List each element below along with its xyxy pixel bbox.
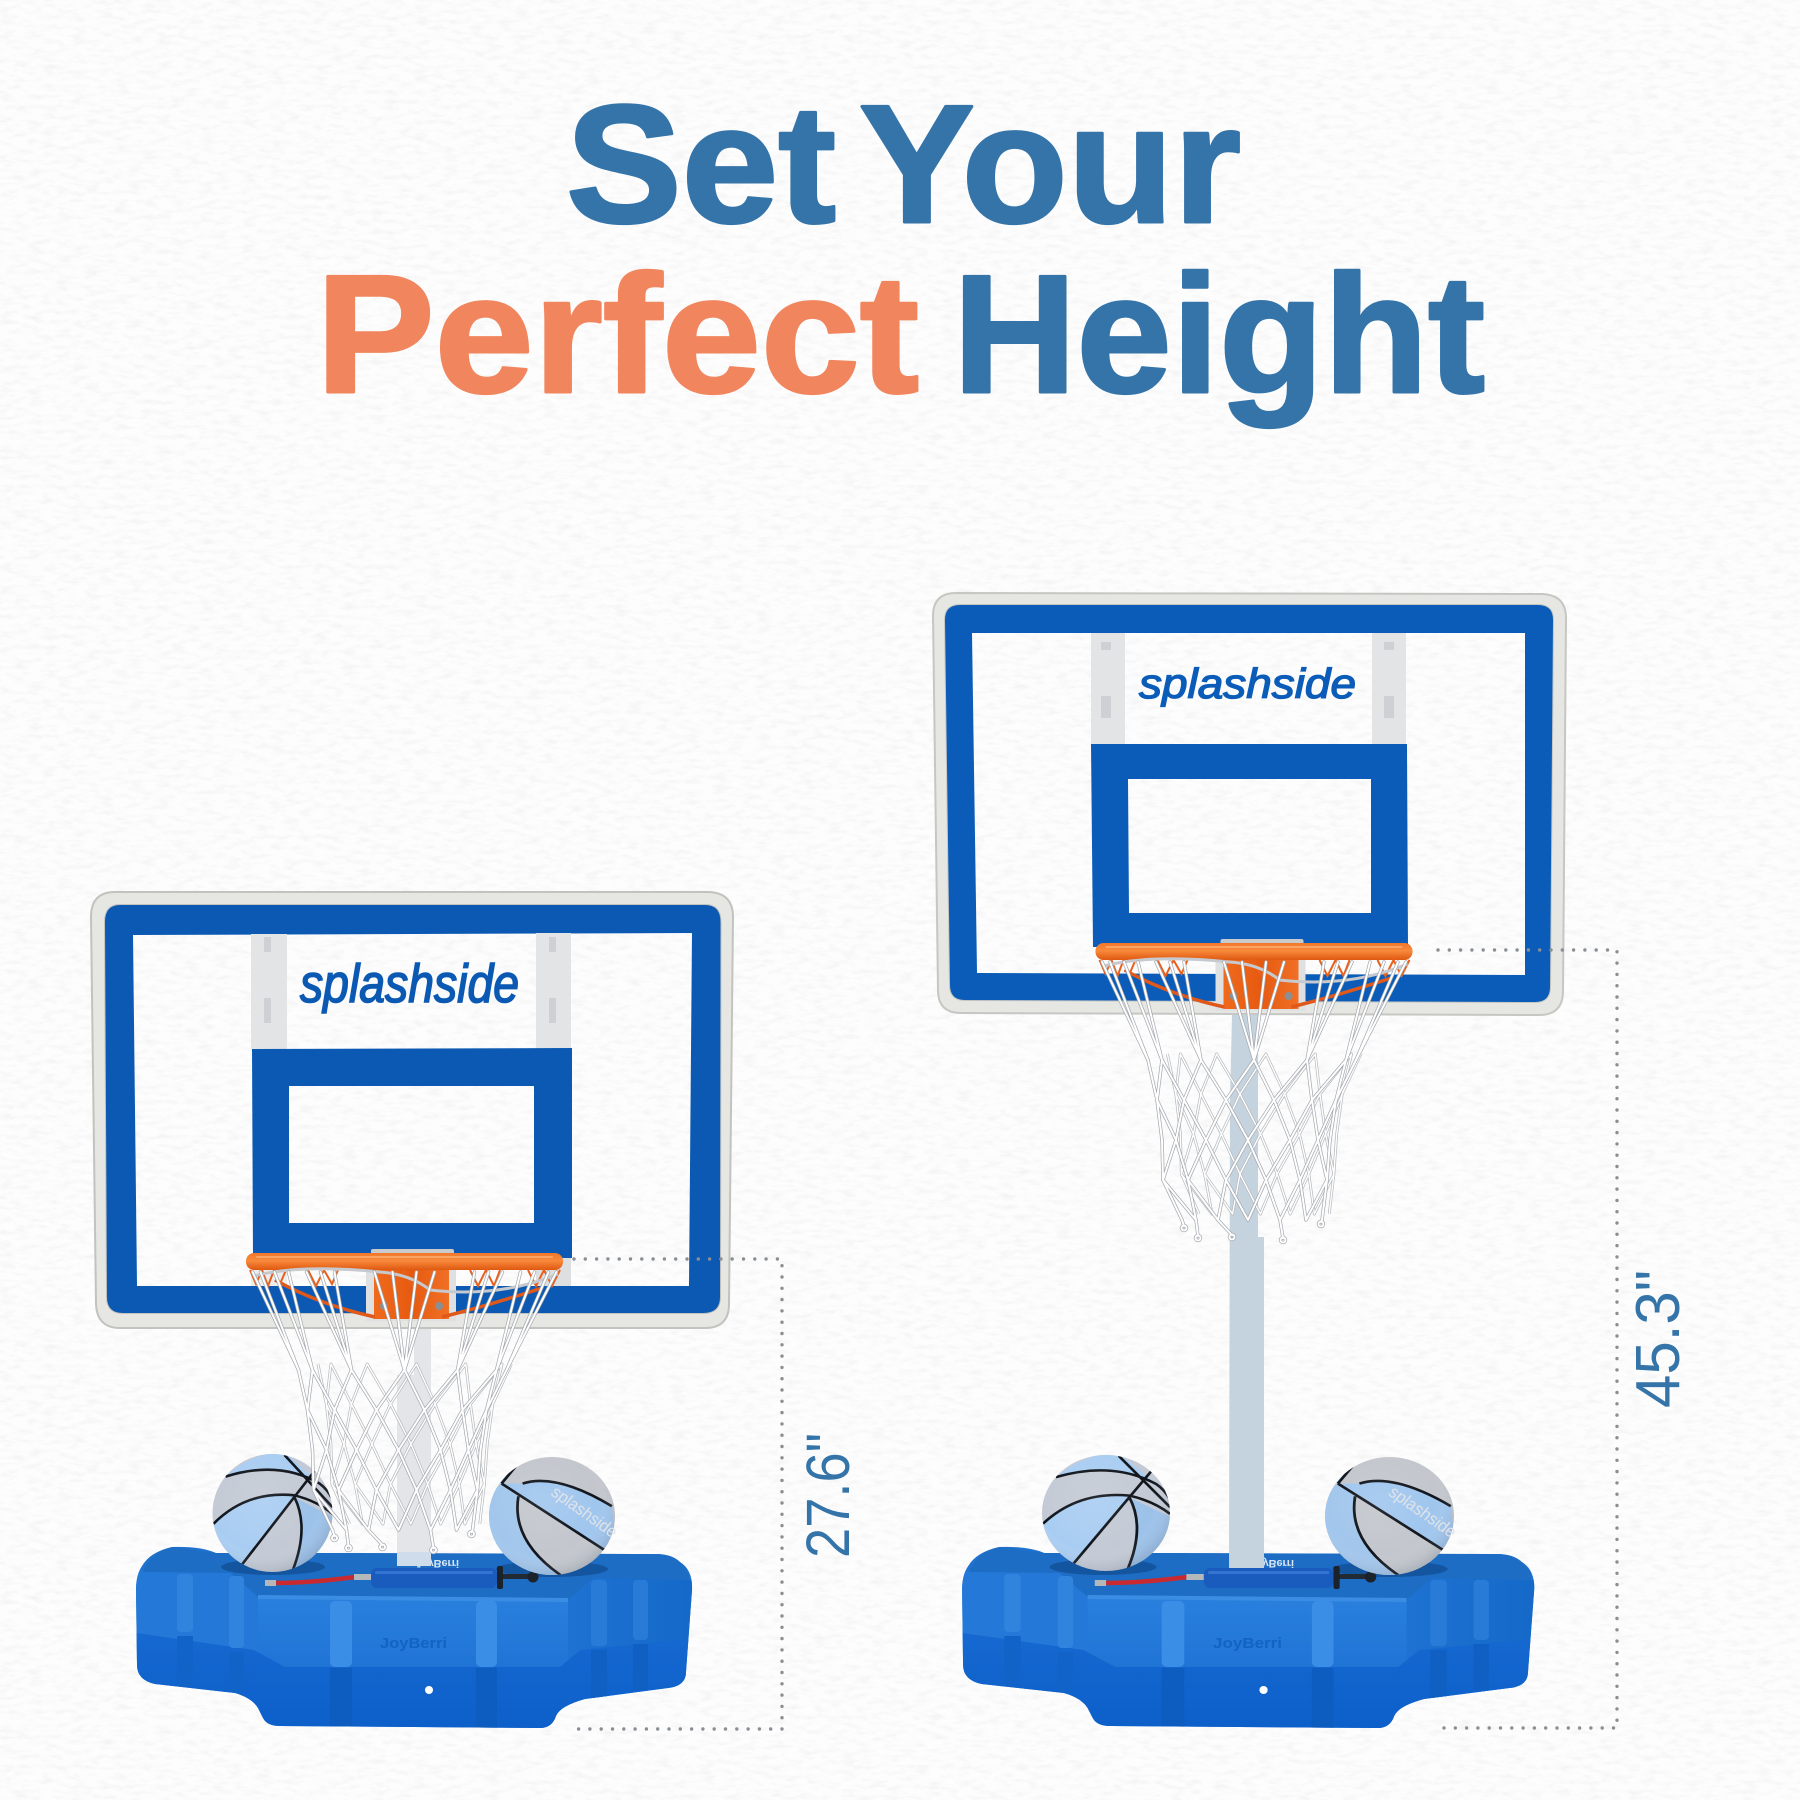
backboard: high setting bbox=[933, 593, 1566, 1015]
height label: 45.3: 45.3" bbox=[1624, 1270, 1693, 1408]
title bbox=[316, 70, 1485, 428]
base: low setting bbox=[130, 1540, 700, 1735]
base: low setting: JoyBerri bbox=[380, 1635, 447, 1652]
basketball: low setting right bbox=[484, 1455, 622, 1580]
height label: 27.6: 27.6" bbox=[794, 1433, 862, 1558]
shooter square bbox=[1091, 744, 1408, 947]
title: Your bbox=[859, 70, 1241, 258]
title: Height bbox=[953, 240, 1485, 428]
base: low setting: JoyBerri bbox=[415, 1557, 459, 1569]
basketball: high setting left bbox=[1040, 1453, 1172, 1571]
pole: low setting bbox=[397, 1329, 431, 1566]
mounting rails bbox=[251, 933, 571, 1286]
pole: high setting bbox=[1229, 1015, 1264, 1568]
board logo: splashside bbox=[1139, 660, 1356, 707]
title: Perfect bbox=[316, 240, 919, 428]
base: high setting: JoyBerri bbox=[1213, 1635, 1282, 1652]
backboard: low setting bbox=[91, 892, 733, 1328]
dimension line: 27.6 bbox=[574, 1259, 782, 1729]
basketball: high setting right: splashside bbox=[1385, 1482, 1461, 1541]
base: high setting: JoyBerri bbox=[1250, 1557, 1294, 1569]
mounting rails bbox=[1091, 633, 1406, 745]
hoop and net: high setting bbox=[1096, 939, 1412, 1242]
hoop and net: low setting bbox=[246, 1249, 563, 1552]
basketball: low setting left bbox=[210, 1452, 334, 1572]
title: Set bbox=[566, 70, 836, 258]
basketball: low setting right: splashside bbox=[547, 1482, 622, 1541]
dimension line: 45.3 bbox=[1438, 950, 1617, 1728]
basketball: high setting right bbox=[1320, 1455, 1461, 1580]
shooter square bbox=[252, 1048, 572, 1258]
board logo: splashside bbox=[300, 954, 519, 1014]
base: high setting bbox=[956, 1540, 1542, 1735]
